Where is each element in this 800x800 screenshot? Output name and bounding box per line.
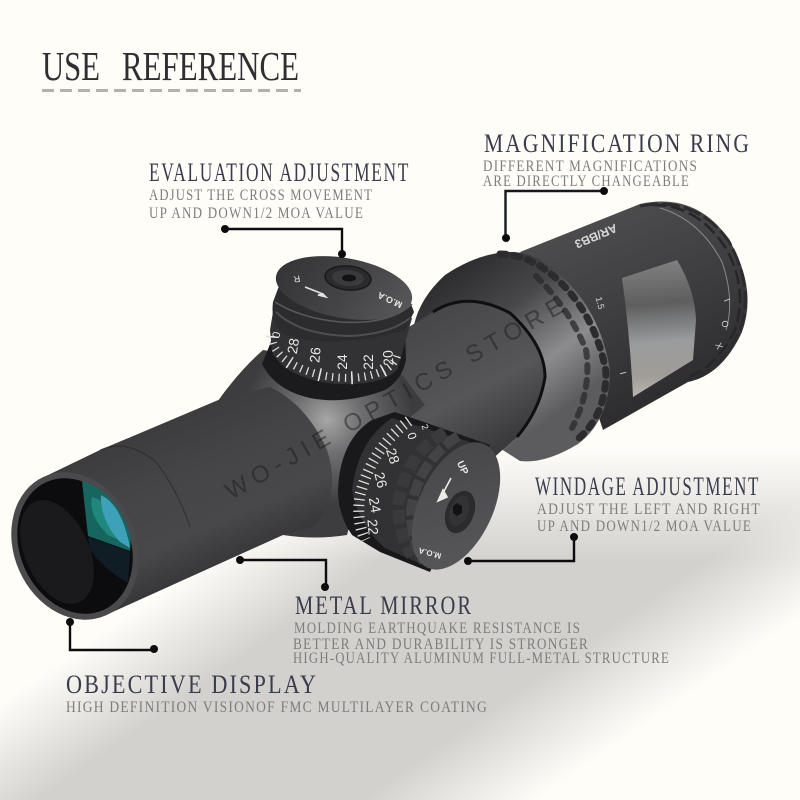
scope: upper elevation turret: 24 <box>334 354 350 370</box>
text block: magnification ring: MAGNIFICATION RING <box>484 129 751 158</box>
scope: lower windage turret <box>338 412 518 583</box>
callout dot: magnification start <box>600 187 608 195</box>
scope: rear tube and magnification ring: O <box>719 319 731 329</box>
text block: evaluation adjustment: ADJUST THE CROSS MOVEMENT <box>149 187 373 204</box>
callout dot: metal start <box>236 556 244 564</box>
watermark: WO-JIE OPTICS STORE <box>221 293 568 505</box>
text block: objective display: HIGH DEFINITION VISIONOF FMC MULTILAYER COATING <box>66 699 488 716</box>
scope: upper elevation turret: 26 <box>306 346 324 363</box>
turret arrow <box>305 287 326 297</box>
text block: metal mirror: HIGH-QUALITY ALUMINUM FULL-METAL STRUCTURE <box>293 650 670 667</box>
callout line: windage <box>468 537 574 561</box>
scope: lower windage turret: 2 <box>419 423 431 431</box>
rifle scope illustration <box>0 202 748 640</box>
scope: rear tube and magnification ring: 1.5 <box>594 296 606 310</box>
scope: objective barrel step <box>100 446 190 527</box>
callout dot: objective start <box>66 618 74 626</box>
scope: center saddle body <box>215 350 425 538</box>
callout line: elevation <box>225 229 342 253</box>
text block: metal mirror: MOLDING EARTHQUAKE RESISTANCE IS <box>294 620 581 637</box>
scope: upper elevation turret: 20 <box>379 349 397 366</box>
callout dot: windage end <box>464 557 472 565</box>
callout dot: elevation end <box>338 250 346 258</box>
scope: lower windage turret: 24 <box>366 496 384 514</box>
callout dot: metal end <box>321 583 329 591</box>
turret arrow <box>438 478 451 501</box>
callout line: metal mirror <box>240 560 326 587</box>
callout dot: elevation start <box>221 225 229 233</box>
callout dot: windage start <box>570 533 578 541</box>
text block: objective display: OBJECTIVE DISPLAY <box>66 670 318 699</box>
scope: upper elevation turret: M.O.A <box>376 290 404 310</box>
text block: evaluation adjustment: EVALUATION ADJUSTMENT <box>149 158 410 187</box>
callout dot: objective end <box>150 645 158 653</box>
scope: upper elevation turret <box>262 246 417 400</box>
scope: lower windage turret: M.O.A <box>417 546 442 560</box>
text block: windage adjustment: ADJUST THE LEFT AND RIGHT <box>537 501 761 518</box>
text block: windage adjustment <box>535 472 761 535</box>
title: USE REFERENCE: REFERENCE <box>122 43 299 89</box>
scope: lower windage turret: 26 <box>371 471 391 490</box>
scope: rear tube and magnification ring: X <box>713 341 725 351</box>
scope: upper elevation turret: 22 <box>360 354 376 370</box>
callout line: magnification <box>506 191 604 238</box>
text block: evaluation adjustment: UP AND DOWN1/2 MOA VALUE <box>149 205 364 222</box>
text block: magnification ring: DIFFERENT MAGNIFICATIONS <box>483 158 698 175</box>
scope: lower windage turret: 28 <box>383 446 403 466</box>
text block: evaluation adjustment <box>149 158 410 222</box>
scope: rear tube and magnification ring: AR/BB3 <box>572 221 619 251</box>
scope: upper elevation turret: R <box>292 274 301 285</box>
text block: metal mirror: BETTER AND DURABILITY IS STRONGER <box>293 636 589 653</box>
scope: lower windage turret: UP <box>454 459 470 477</box>
text block: metal mirror <box>293 591 670 667</box>
title: USE REFERENCE: USE <box>42 43 100 89</box>
text block: magnification ring: ARE DIRECTLY CHANGEABLE <box>483 173 690 190</box>
scope: rear tube and magnification ring: I <box>618 370 628 376</box>
title: USE REFERENCE <box>42 43 301 90</box>
text block: windage adjustment: UP AND DOWN1/2 MOA VALUE <box>537 518 752 535</box>
scope: lower windage turret: 0 <box>404 431 420 442</box>
scope: objective lens <box>0 452 162 640</box>
scope: upper elevation turret: 28 <box>284 337 302 355</box>
text block: magnification ring <box>483 129 751 190</box>
text block: objective display <box>66 670 488 716</box>
callout line: objective <box>70 622 154 650</box>
scope: upper elevation turret: 0 <box>270 331 284 339</box>
scope: lower windage turret: 22 <box>364 519 382 536</box>
scope: front tube <box>44 387 332 615</box>
text block: metal mirror: METAL MIRROR <box>295 591 473 620</box>
scope: rear tube and magnification ring: I <box>722 297 732 303</box>
scope: rear tube and magnification ring <box>380 202 748 470</box>
callout dot: magnification end <box>502 234 510 242</box>
